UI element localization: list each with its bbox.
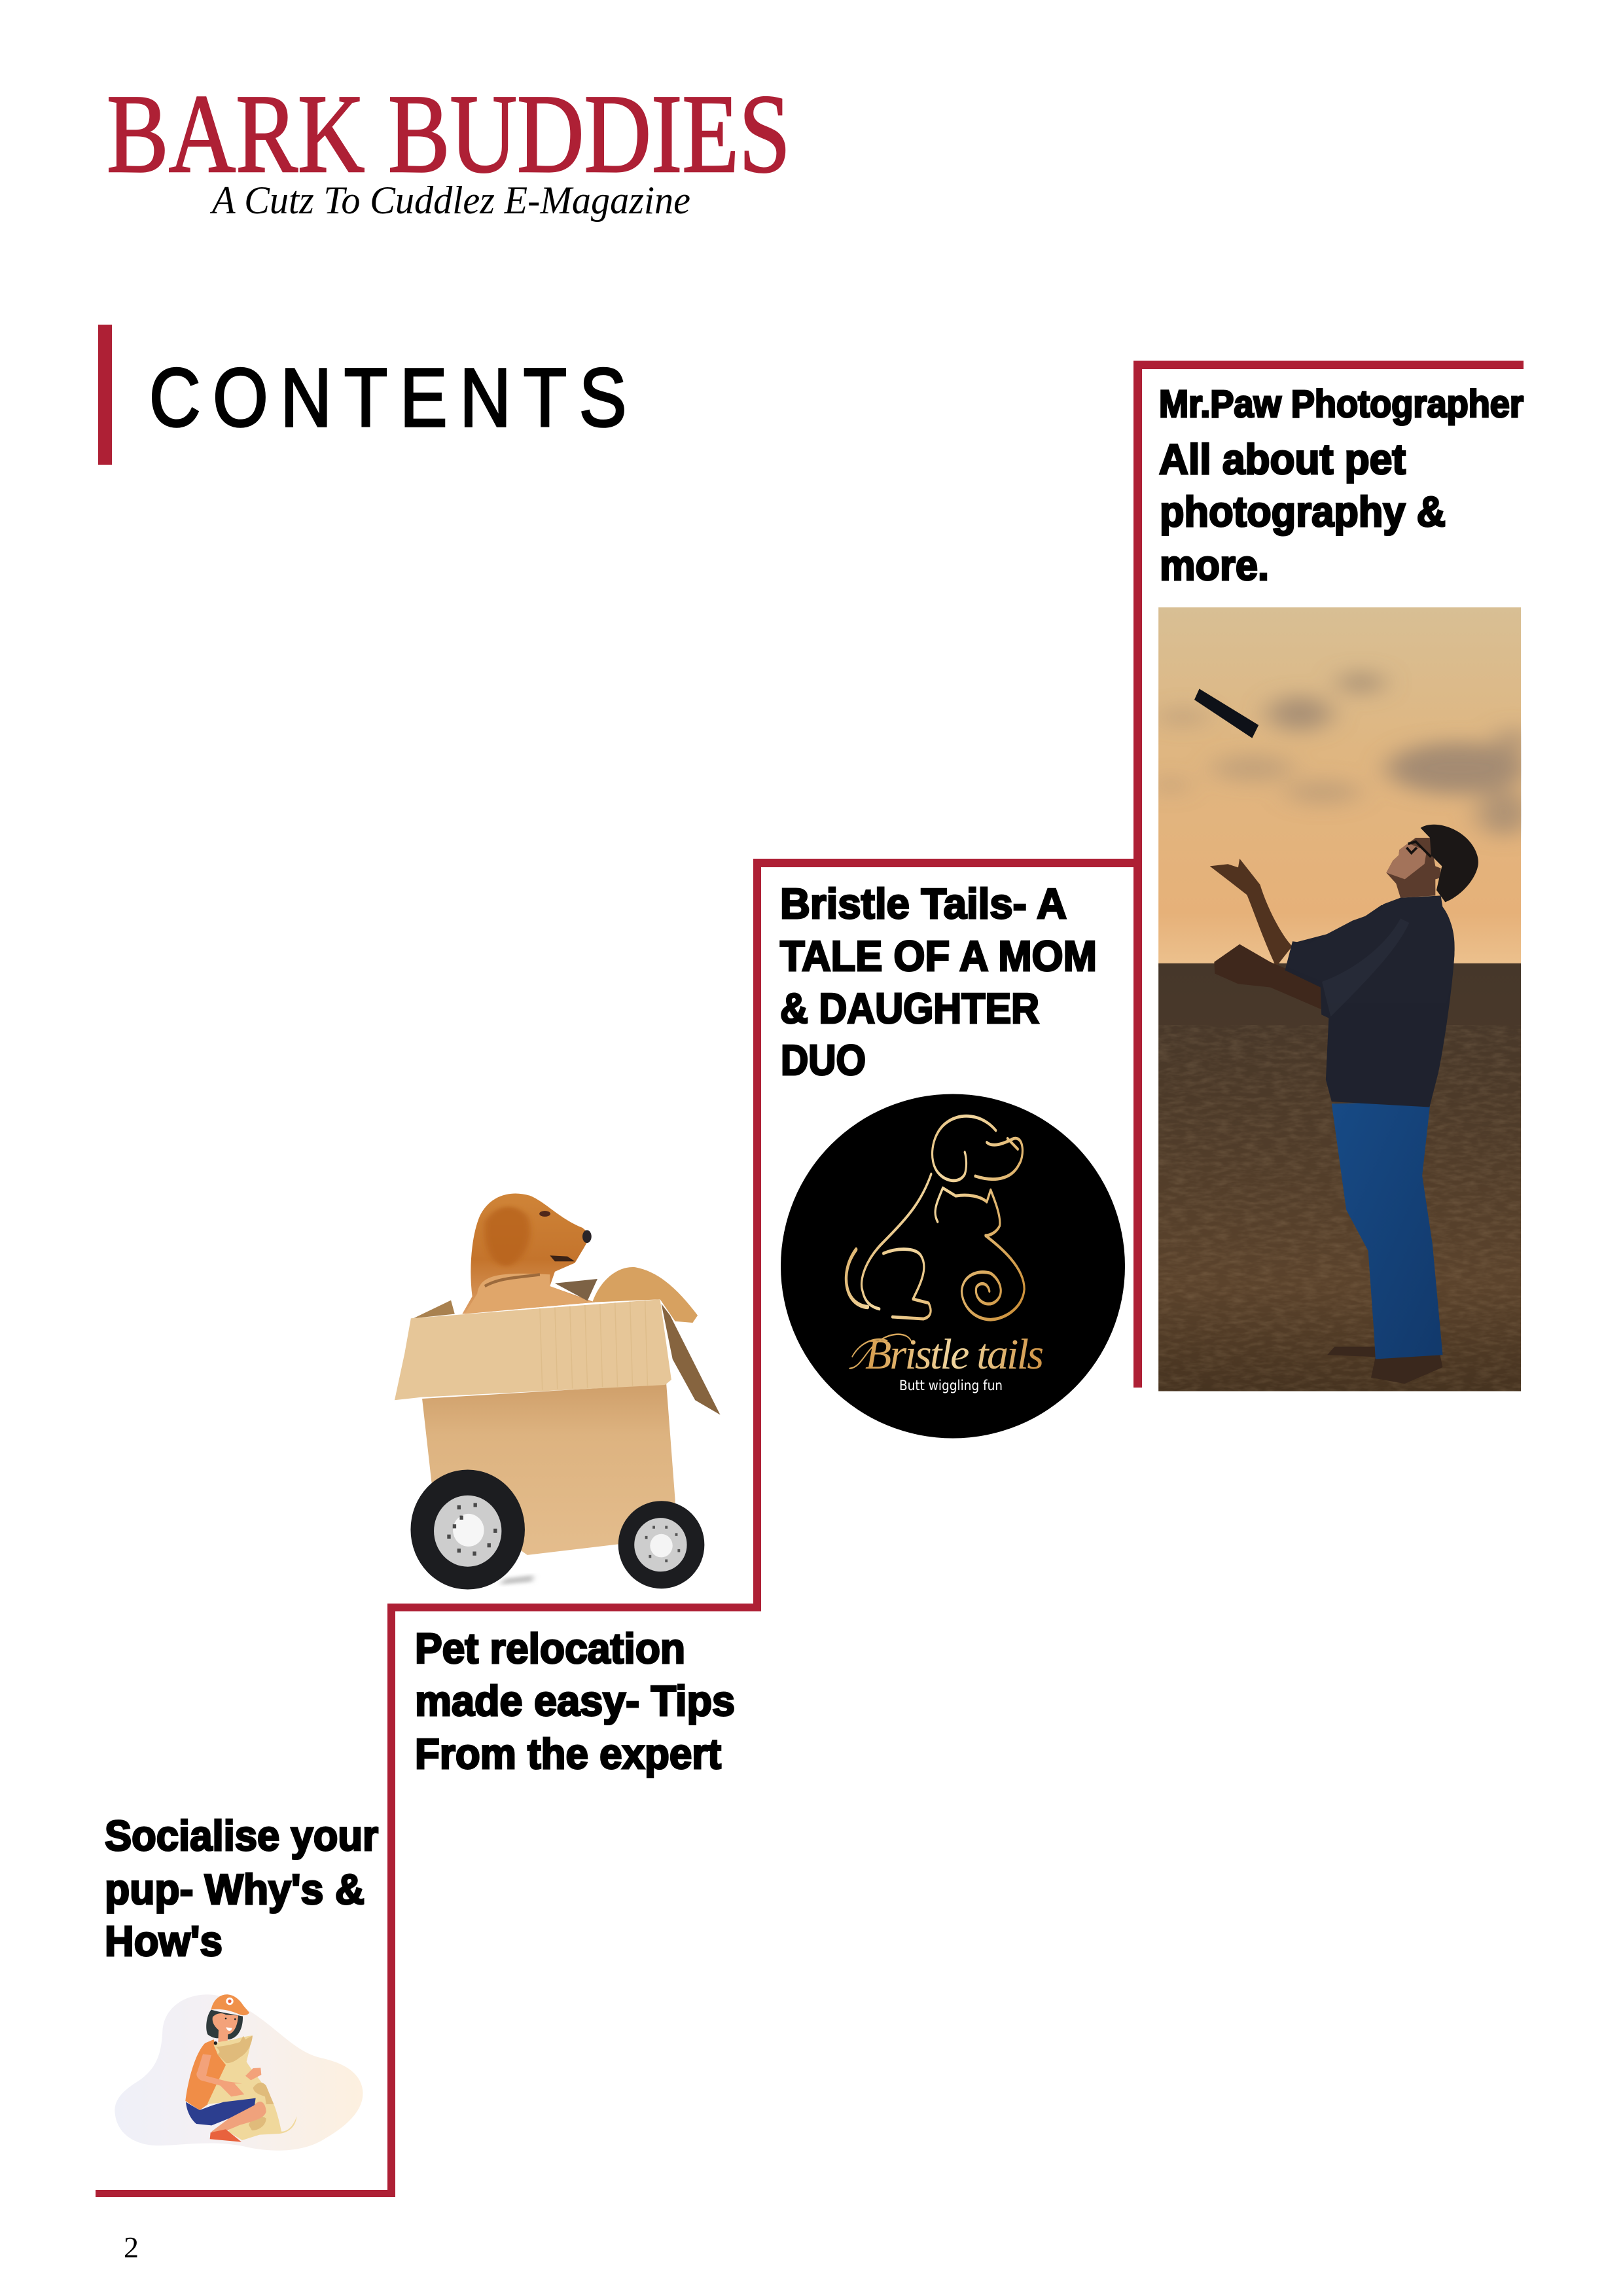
text: Pet relocation: Pet relocation: [415, 1624, 685, 1672]
page number: 2: [124, 2231, 139, 2264]
illustration: woman hugging a dog: [115, 1994, 363, 2151]
text: Mr.Paw Photographer: Mr.Paw Photographer: [1159, 383, 1524, 425]
text: Bristle Tails: DUO: [781, 1036, 866, 1084]
text: Bristle Tails: TALE OF A MOM: [780, 932, 1097, 980]
masthead: Bark Buddies: A Cutz To Cuddlez E-Magazine: [209, 179, 690, 222]
text: Bristle Tails: Bristle Tails- A: [780, 880, 1067, 927]
text: Pet relocation: [415, 1624, 735, 1778]
illustration: dog in a cardboard box on wheels: [395, 1194, 720, 1590]
logo: Bristle tails badge: [781, 1094, 1125, 1439]
text: Mr.Paw Photographer: All about pet: [1159, 435, 1406, 483]
man lower body and arms: [1210, 859, 1455, 1384]
masthead: Bark Buddies: BARK BUDDIES: [107, 72, 791, 196]
text: Socialise your pup: pup- Why's &: [105, 1865, 365, 1913]
logo: Bristle tails badge: Bristle tails: [865, 1331, 1044, 1378]
icon: right wheel: [618, 1501, 704, 1588]
staircase divider lines: [96, 361, 1524, 2197]
text: Mr.Paw Photographer: more.: [1160, 541, 1269, 589]
text: Mr.Paw Photographer: [1159, 383, 1524, 589]
text: Socialise your pup: Socialise your: [105, 1812, 378, 1859]
icon: tossed phone: [1194, 689, 1258, 738]
logo: Bristle tails badge: Butt wiggling fun: [899, 1378, 1003, 1393]
heading: contents: [98, 325, 626, 465]
icon: left wheel: [410, 1470, 525, 1590]
text: Socialise your pup: How's: [105, 1917, 223, 1965]
text: Mr.Paw Photographer: photography &: [1160, 488, 1446, 535]
text: Bristle Tails: & DAUGHTER: [780, 984, 1039, 1032]
text: Pet relocation: made easy- Tips: [415, 1677, 735, 1725]
text: Bristle Tails: [780, 880, 1097, 1084]
heading: contents: CONTENTS: [149, 351, 626, 444]
photo: man tossing a phone at sunset on a beach: [1153, 607, 1530, 1391]
man head and shoulders: [1286, 825, 1478, 1016]
text: Socialise your pup: [105, 1812, 378, 1965]
text: Pet relocation: From the expert: [415, 1730, 721, 1778]
